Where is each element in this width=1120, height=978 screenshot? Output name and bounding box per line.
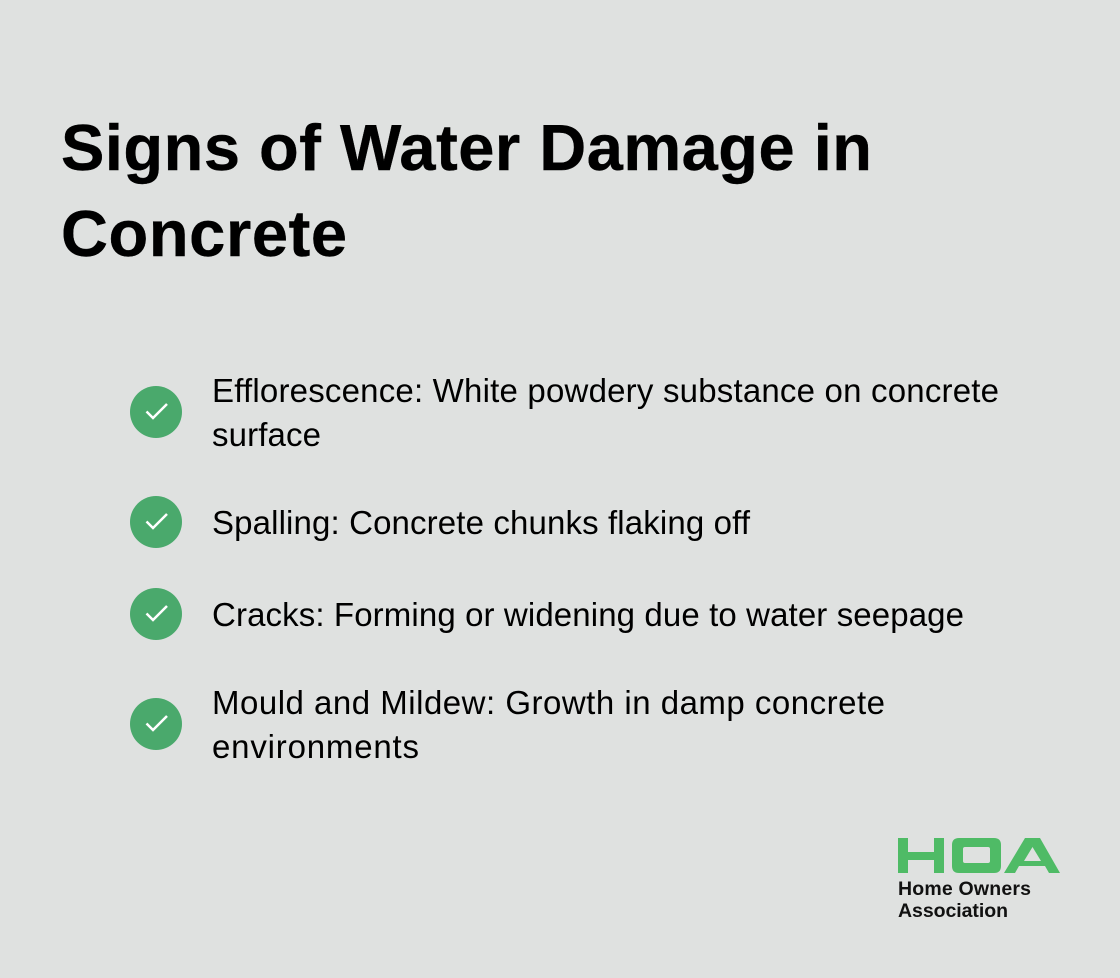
item: efflorescence: surface (212, 416, 321, 453)
list (130, 372, 999, 765)
title: Signs of Water Damage in (61, 111, 872, 184)
logo: HOA (898, 838, 1060, 922)
item: mould and mildew: Mould and Mildew: Growth in damp concrete (212, 684, 885, 721)
item: mould and mildew (130, 684, 885, 765)
item: efflorescence (130, 372, 999, 453)
logo: HOA: Association (898, 900, 1008, 922)
item: spalling (130, 496, 751, 548)
logo caption: Home Owners (898, 878, 1031, 900)
item: mould and mildew: environments (212, 728, 419, 765)
title: Concrete (61, 197, 347, 270)
logo letters (898, 838, 1060, 873)
title (61, 111, 872, 270)
item: cracks: Cracks: Forming or widening due to water seepage (212, 596, 964, 633)
item: spalling: Spalling: Concrete chunks flaking off (212, 504, 751, 541)
item: efflorescence: Efflorescence: White powdery substance on concrete (212, 372, 999, 409)
item: cracks (130, 588, 964, 640)
